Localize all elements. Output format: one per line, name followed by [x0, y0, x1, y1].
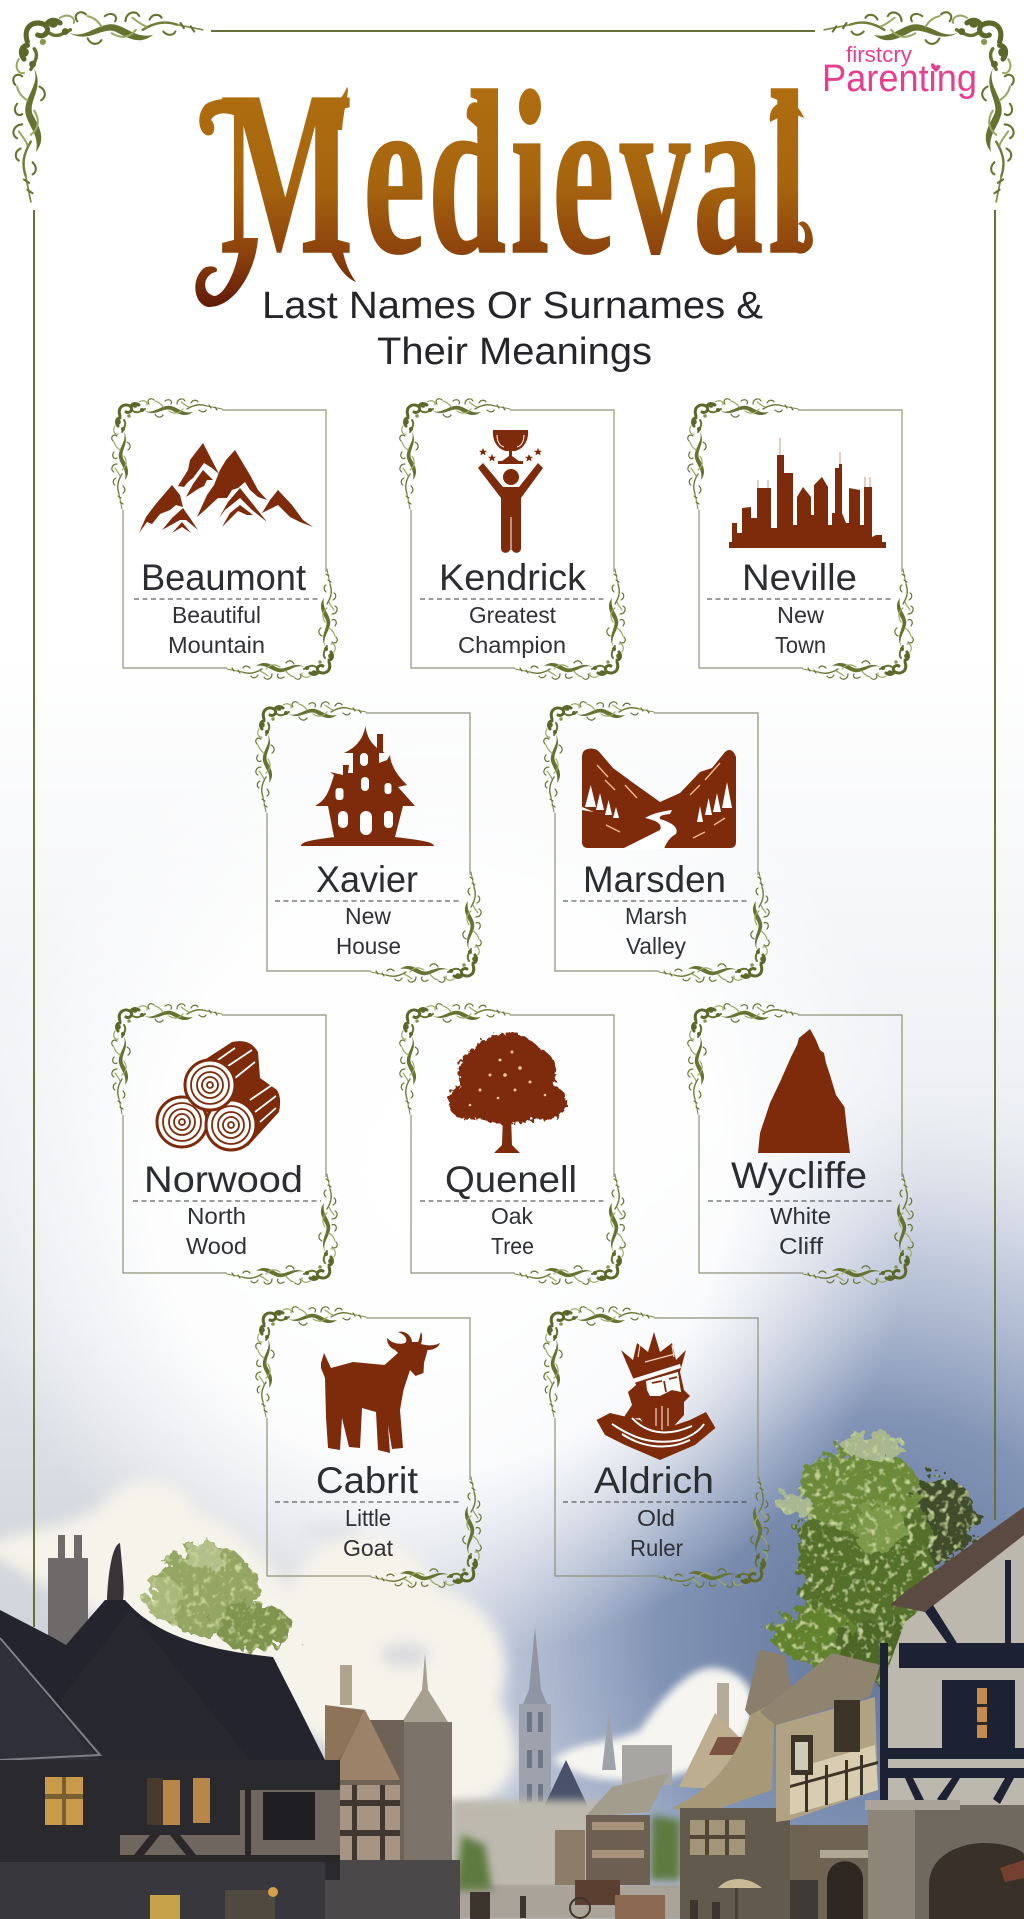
meaning: Cliff — [779, 1233, 824, 1259]
meaning: North — [187, 1203, 246, 1229]
big half-timbered house — [865, 1507, 1024, 1919]
title: Medieval: Medieval — [220, 42, 807, 303]
right tree — [773, 1433, 977, 1680]
meaning: Beautiful — [172, 602, 261, 628]
icon: champion with trophy — [478, 430, 543, 553]
card: Beaumont — [112, 399, 337, 679]
meaning: Valley — [626, 933, 686, 959]
left dark building — [0, 1535, 340, 1919]
meaning — [168, 602, 265, 658]
card: Cabrit — [256, 1307, 481, 1587]
subtitle — [262, 285, 763, 373]
meaning: New — [777, 602, 824, 628]
left tree — [145, 1544, 293, 1652]
meaning: White — [770, 1203, 831, 1229]
meaning: Wood — [186, 1233, 247, 1259]
meaning — [336, 903, 401, 959]
name: Beaumont — [141, 557, 307, 598]
right houses — [672, 1650, 892, 1919]
card: Norwood — [112, 1004, 337, 1284]
name: Kendrick — [439, 557, 587, 598]
meaning — [343, 1505, 394, 1561]
meaning — [775, 602, 826, 658]
icon: oak tree — [448, 1033, 567, 1153]
meaning: New — [345, 903, 391, 929]
card: Marsden — [544, 702, 769, 982]
name: Aldrich — [594, 1460, 714, 1501]
name: Wycliffe — [731, 1155, 867, 1196]
meaning — [625, 903, 687, 959]
meaning: Town — [775, 632, 826, 658]
card: Kendrick — [400, 399, 625, 679]
icon: house — [301, 726, 434, 846]
card: Aldrich — [544, 1307, 769, 1587]
subtitle: Last Names Or Surnames & — [262, 285, 763, 327]
icon: valley — [582, 749, 736, 849]
icon: white cliff — [758, 1029, 850, 1153]
card: Neville — [688, 399, 913, 679]
name: Norwood — [144, 1159, 303, 1200]
meaning — [630, 1505, 683, 1561]
meaning: Goat — [343, 1535, 394, 1561]
meaning: Champion — [458, 632, 566, 658]
church and distant town — [450, 1627, 700, 1919]
meaning: Little — [345, 1505, 391, 1531]
name: Neville — [742, 557, 857, 598]
meaning: Marsh — [625, 903, 687, 929]
logo: FirstCry Parenting: firstcry — [846, 42, 912, 67]
icon: city skyline — [729, 438, 886, 548]
name: Quenell — [445, 1159, 577, 1200]
meaning: House — [336, 933, 401, 959]
meaning — [491, 1203, 534, 1259]
meaning — [458, 602, 566, 658]
title flourishes — [195, 87, 813, 307]
meaning: Old — [637, 1505, 675, 1531]
card: Xavier — [256, 702, 481, 982]
middle tower house — [325, 1653, 460, 1919]
name: Marsden — [583, 859, 726, 900]
meaning: Tree — [491, 1233, 534, 1259]
name: Xavier — [316, 859, 418, 900]
card: Wycliffe — [688, 1004, 913, 1284]
icon: mountains — [139, 443, 313, 533]
meaning: Greatest — [469, 602, 557, 628]
logo: FirstCry Parenting: Parenting — [822, 58, 977, 100]
logo: FirstCry Parenting — [822, 42, 977, 100]
icon: goat — [321, 1332, 440, 1453]
icon: king — [596, 1332, 716, 1460]
street carts and people — [470, 1880, 720, 1919]
name: Cabrit — [316, 1460, 419, 1501]
meaning: Oak — [491, 1203, 533, 1229]
meaning: Ruler — [630, 1535, 683, 1561]
meaning: Mountain — [168, 632, 265, 658]
illustration: medieval town scene — [0, 1433, 1024, 1919]
icon: logs — [157, 1041, 280, 1150]
meaning — [186, 1203, 247, 1259]
meaning — [770, 1203, 831, 1259]
subtitle: Their Meanings — [377, 331, 652, 373]
card: Quenell — [400, 1004, 625, 1284]
